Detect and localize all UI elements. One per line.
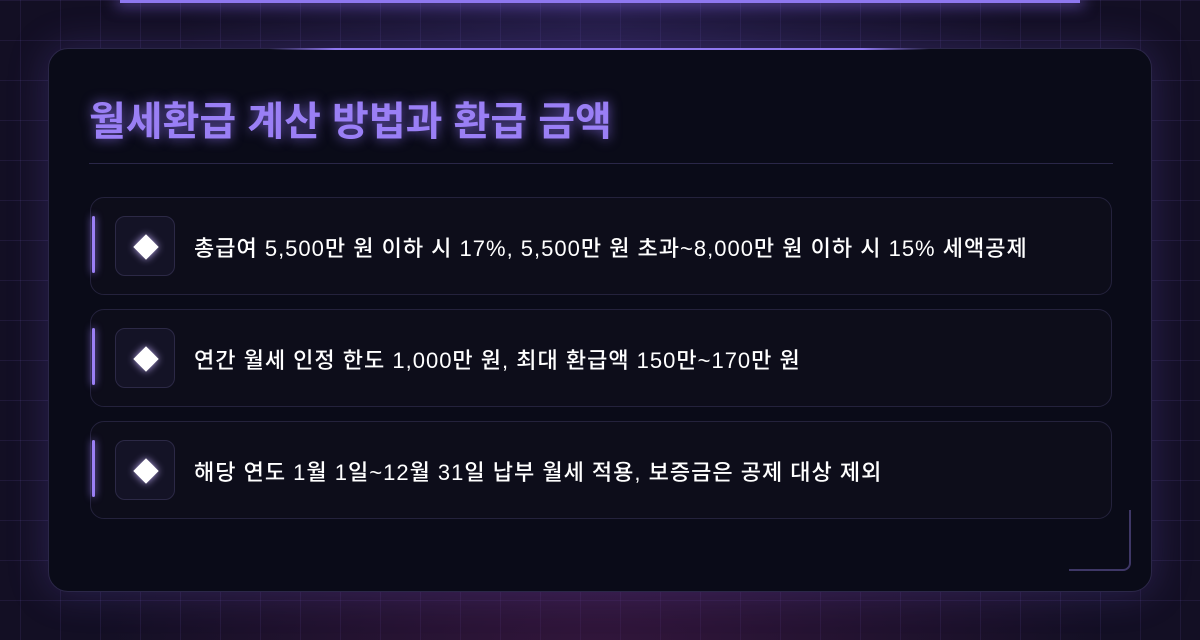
text 3: 해당 연도 1월 1일~12월 31일 납부 월세 적용, 보증금은 공제 대상 제외 xyxy=(194,460,882,485)
title: 월세환급 계산 방법과 환급 금액 xyxy=(89,100,612,144)
card 3 xyxy=(90,421,1112,519)
icon: diamond xyxy=(115,216,175,276)
card 1 xyxy=(90,197,1112,295)
icon: diamond xyxy=(115,440,175,500)
icon: diamond xyxy=(115,328,175,388)
card 2 xyxy=(90,309,1112,407)
panel: main xyxy=(48,48,1152,592)
text 1: 총급여 5,500만 원 이하 시 17%, 5,500만 원 초과~8,000만 원 이하 시 15% 세액공제 xyxy=(194,236,1028,261)
text 2: 연간 월세 인정 한도 1,000만 원, 최대 환급액 150만~170만 원 xyxy=(194,348,801,373)
